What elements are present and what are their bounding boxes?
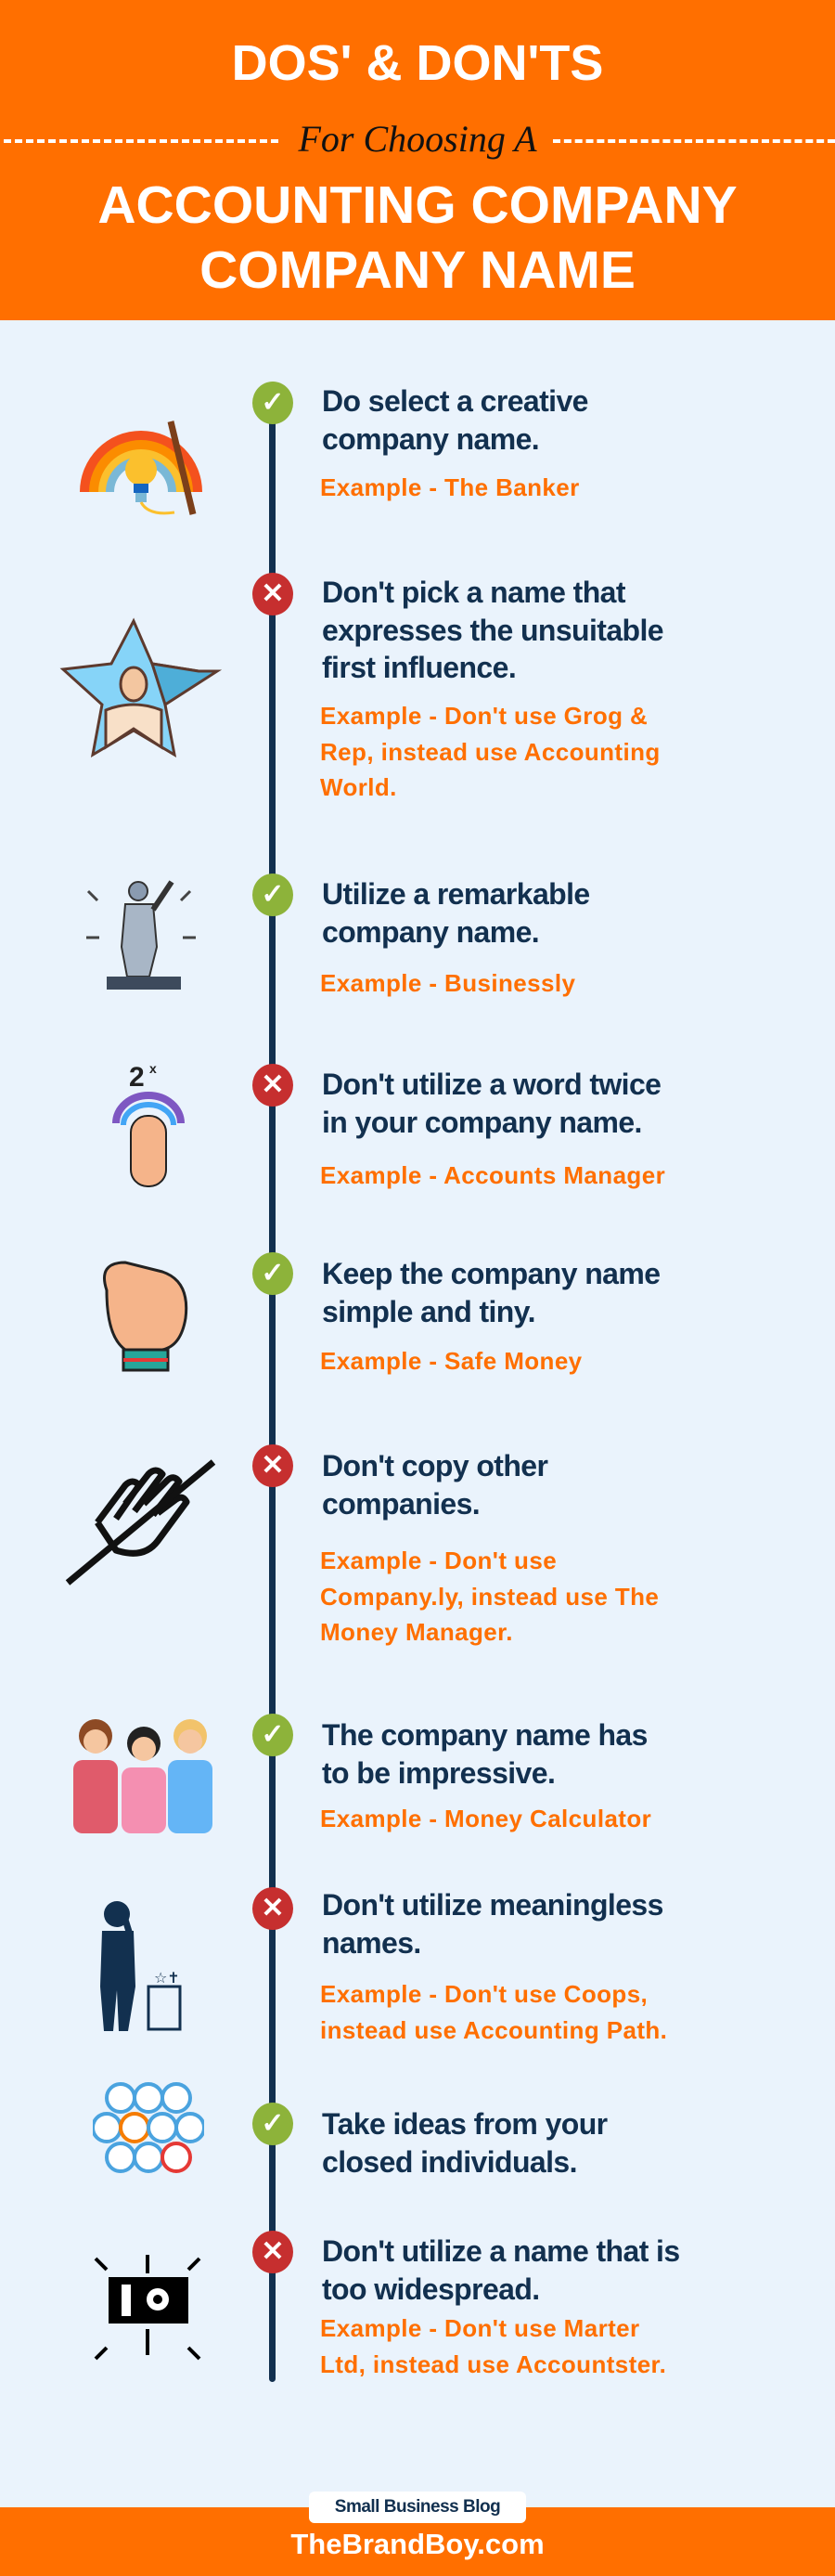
item 3 [86,874,590,997]
heading: Don't copy other [322,1449,547,1482]
heading: expresses the unsuitable [322,613,663,646]
heading [322,1718,648,1790]
title line 2: COMPANY NAME [199,240,636,300]
marker: cross: ✕ [261,1893,285,1923]
icon: three women [73,1719,212,1833]
marker: cross [252,1444,293,1487]
heading: Don't utilize a name that is [322,2234,680,2268]
icon: finger 2x [112,1061,185,1187]
icon: hexagon network [93,2082,204,2173]
item 6 [65,1444,659,1646]
heading: companies. [322,1487,480,1521]
marker: cross [252,573,293,615]
marker: cross [252,2231,293,2273]
heading [322,877,590,949]
heading: too widespread. [322,2272,540,2306]
heading: Do select a creative [322,384,588,418]
footer [0,2507,835,2576]
marker: check [252,874,293,916]
icon: finger 2x: x [149,1061,157,1076]
marker: cross: ✕ [261,1450,285,1481]
item 10 [95,2231,680,2378]
subtitle script: For Choosing A [298,118,537,160]
footer badge [309,2492,526,2523]
marker: check [252,1714,293,1756]
heading: to be impressive. [322,1756,555,1790]
timeline line [269,408,276,2382]
example: Example - Don't use Coops, [320,1980,648,2008]
title line 2: ACCOUNTING COMPANY [97,175,738,235]
example: Company.ly, instead use The [320,1582,659,1610]
item 8 [100,1887,667,2044]
heading: Utilize a remarkable [322,877,590,911]
title line 1: DOS' & DON'TS [232,35,603,91]
heading [322,1257,660,1327]
example: Money Manager. [320,1618,513,1646]
marker: cross [252,1887,293,1930]
heading [322,2234,680,2306]
heading: simple and tiny. [322,1294,535,1327]
icon: man with bin: ☆✝ [154,1969,180,1987]
icon: rainbow bulb [80,421,202,515]
icon: finger 2x: 2 [129,1062,145,1093]
marker: check [252,382,293,424]
icon: star person [59,618,222,757]
heading: Don't utilize a word twice [322,1068,661,1101]
heading: Don't pick a name that [322,576,625,609]
footer site name: TheBrandBoy.com [290,2528,545,2560]
marker: check: ✓ [261,387,285,418]
heading: closed individuals. [322,2144,577,2178]
heading: Take ideas from your [322,2107,608,2141]
heading [322,2107,608,2178]
example: Example - Money Calculator [320,1805,651,1832]
heading: first influence. [322,651,516,684]
heading: in your company name. [322,1105,642,1138]
heading [322,576,663,684]
header [0,0,835,320]
marker: check: ✓ [261,2108,285,2139]
marker: check: ✓ [261,879,285,910]
icon: man with bin [100,1901,182,2031]
heading: names. [322,1925,421,1959]
item 4 [112,1061,665,1189]
item 5 [103,1252,660,1375]
example: Example - Don't use Marter [320,2314,640,2342]
icon: widespread box [95,2255,200,2360]
example: Example - Don't use [320,1547,557,1574]
marker: check [252,2103,293,2145]
example [320,1547,659,1646]
example [320,1980,667,2044]
heading [322,384,588,455]
item 9 [93,2082,608,2178]
marker: check [252,1252,293,1295]
example: Example - Safe Money [320,1347,583,1375]
example: Example - The Banker [320,473,580,501]
example: instead use Accounting Path. [320,2016,667,2044]
item 1 [80,382,588,515]
marker: cross: ✕ [261,578,285,609]
heading: company name. [322,915,539,949]
footer badge: Small Business Blog [335,2497,500,2517]
marker: cross: ✕ [261,1069,285,1100]
marker: cross: ✕ [261,2236,285,2267]
icon: fist [103,1261,187,1372]
example: Ltd, instead use Accountster. [320,2350,666,2378]
marker: cross [252,1064,293,1107]
heading: Don't utilize meaningless [322,1888,663,1922]
heading: company name. [322,421,539,455]
heading [322,1888,663,1959]
icon: no copy hand [65,1459,215,1586]
item 7 [73,1714,651,1833]
heading: Keep the company name [322,1257,660,1290]
example: Example - Don't use Grog & [320,702,648,730]
example [320,702,661,801]
marker: check: ✓ [261,1719,285,1750]
example: Rep, instead use Accounting [320,737,661,765]
example [320,2314,666,2378]
heading: The company name has [322,1718,648,1752]
heading [322,1449,547,1521]
marker: check: ✓ [261,1258,285,1288]
item 2 [59,573,663,801]
title line 2 [97,175,738,300]
example: Example - Accounts Manager [320,1161,665,1189]
icon: statue [86,880,196,990]
heading [322,1068,661,1138]
example: World. [320,773,397,801]
example: Example - Businessly [320,969,575,997]
